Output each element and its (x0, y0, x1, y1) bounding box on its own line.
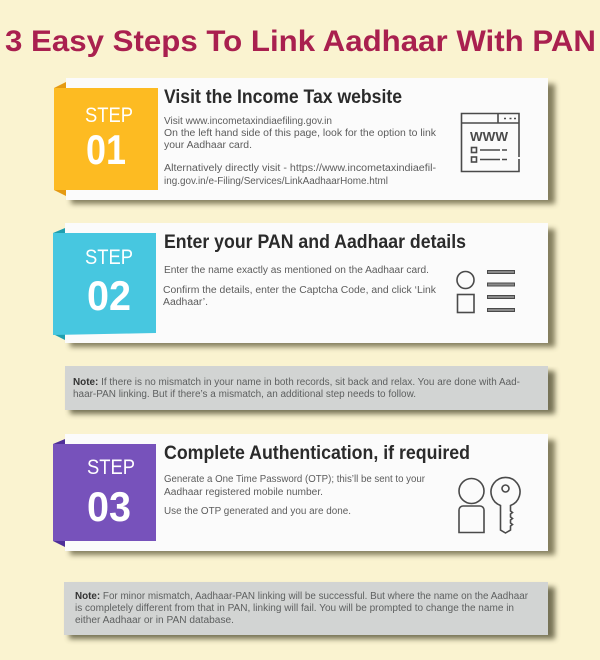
note 1: haar-PAN linking. But if there’s a mismatch, an additional step needs to follow. (73, 389, 416, 400)
step 3 body text: Use the OTP generated and you are done. (164, 506, 351, 517)
note 2: is completely different from that in PAN, linking will fail. You will be prompted to change the name in (75, 603, 514, 614)
step 2 badge: STEP (85, 246, 133, 269)
step 3 badge: STEP (87, 456, 135, 479)
step 1 body text (164, 116, 437, 187)
step 2 body text: Enter the name exactly as mentioned on the Aadhaar card. (164, 265, 429, 276)
step 1 badge: 01 (86, 126, 126, 173)
note 2 (64, 582, 555, 639)
step 1 heading: Visit the Income Tax website (164, 86, 402, 108)
step 2 body text: Confirm the details, enter the Captcha Code, and click ‘Link (163, 285, 437, 296)
step 1 body text: ing.gov.in/e-Filing/Services/LinkAadhaarHome.html (164, 176, 388, 187)
panel: step 2 (53, 223, 555, 347)
step 3 body text: Aadhaar registered mobile number. (164, 487, 323, 498)
icon: browser window (462, 114, 519, 172)
step 3 badge: 03 (87, 483, 131, 530)
step 2 badge (53, 233, 156, 335)
icon: person with list (457, 270, 514, 312)
step 3 heading: Complete Authentication, if required (164, 442, 470, 464)
note 1 (65, 366, 555, 414)
title: 3 Easy Steps To Link Aadhaar With PAN (5, 25, 596, 58)
icon: browser window: WWW (470, 129, 509, 144)
panel: step 3 (53, 434, 555, 555)
step 1 body text: your Aadhaar card. (164, 140, 252, 151)
step 3 body text: Generate a One Time Password (OTP); this’ll be sent to your (164, 474, 426, 485)
step 2 body text: Aadhaar’. (163, 297, 208, 308)
step 1 body text: Visit www.incometaxindiaefiling.gov.in (164, 116, 332, 127)
step 2 heading: Enter your PAN and Aadhaar details (164, 231, 466, 253)
step 3 badge (53, 444, 156, 541)
step 1 badge: STEP (85, 104, 133, 127)
step 1 badge (54, 88, 158, 190)
step 2 badge: 02 (87, 272, 131, 319)
step 3 body text (164, 474, 426, 517)
note 2: Note: For minor mismatch, Aadhaar-PAN linking will be successful. But where the name on the Aadhaar (75, 591, 529, 602)
note 2: either Aadhaar or in PAN database. (75, 615, 234, 626)
panel: step 1 (54, 78, 555, 204)
step 1 body text: On the left hand side of this page, look for the option to link (164, 128, 437, 139)
step 1 body text: Alternatively directly visit - https://www.incometaxindiaefil- (164, 163, 436, 174)
step 2 body text (163, 265, 437, 308)
icon: person with key (459, 477, 520, 533)
note 1: Note: If there is no mismatch in your name in both records, sit back and relax. You are done with Aad- (73, 377, 520, 388)
